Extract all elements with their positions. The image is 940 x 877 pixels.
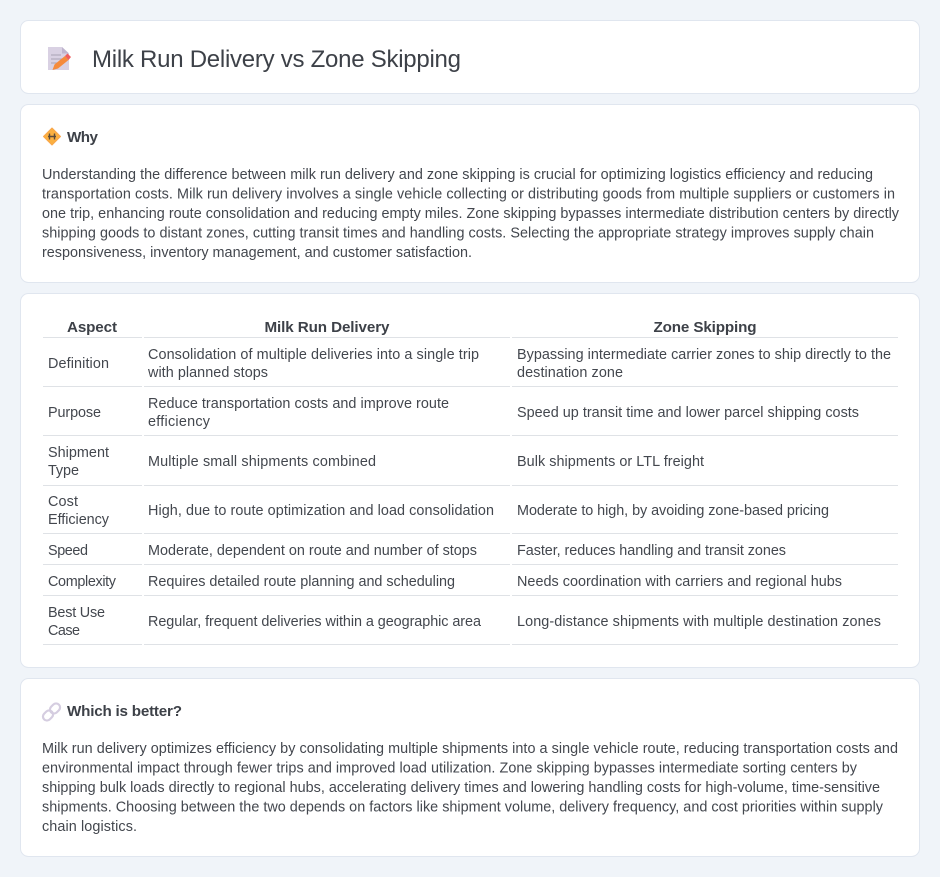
text block: why explanation: one trip, enhancing route consolidation and reducing empty miles. Zone skipping bypasses intermediate distribution centers by directly [42,206,900,222]
table row: complexity: Complexity [48,574,117,590]
table row: shipment type [48,445,704,479]
table row: purpose: efficiency [148,414,211,430]
table row: cost efficiency: Cost [48,494,78,510]
heading: which is better: Which is better? [67,703,182,720]
table row: best use case [48,605,881,639]
table row: definition: Consolidation of multiple deliveries into a single trip [148,347,479,363]
table row: definition: destination zone [517,365,623,381]
table row: cost efficiency: Efficiency [48,512,110,528]
table row: purpose [48,396,859,430]
table row: speed: Speed [48,543,88,559]
text block: why explanation: Understanding the difference between milk run delivery and zone skipping is crucial for optimizing logistics efficiency and reducing [42,167,873,183]
panel: which is better [20,678,920,856]
heading: title text: Milk Run Delivery vs Zone Skipping [92,46,461,73]
table header: Milk Run Delivery [264,319,390,336]
table row: speed: Faster, reduces handling and transit zones [517,543,786,559]
table row: definition: Definition [48,356,109,372]
table row: best use case: Case [48,623,80,639]
text block: verdict: shipping bulk loads directly to regional hubs, accelerating delivery times and lowering handling costs for high-volume, time-sensitive [42,780,880,796]
table row: complexity: Needs coordination with carriers and regional hubs [517,574,842,590]
table row: speed: Moderate, dependent on route and number of stops [148,543,477,559]
text block: why explanation [42,167,900,261]
icon: memo with pencil [48,47,71,70]
table row: best use case: Regular, frequent deliveries within a geographic area [148,614,481,630]
table row: speed [48,543,786,559]
text block: verdict: shipments. Choosing between the two depends on factors like shipment volume, delivery frequency, and cost priorities within supply [42,800,884,816]
table header: Zone Skipping [654,319,756,336]
text block: verdict: environmental impact through fewer trips and improved load utilization. Zone skipping bypasses intermediate sorting centers by [42,760,858,776]
table row: shipment type: Shipment [48,445,109,461]
icon: link [41,702,62,722]
table row: definition: with planned stops [147,365,268,381]
table row: shipment type: Type [48,463,79,479]
text block: verdict [42,741,898,835]
table header: Aspect [67,319,117,336]
text block: why explanation: shipping goods to distant zones, cutting transit times and handling costs. Selecting the appropriate strategy improves supply chain [42,226,874,242]
table row: best use case: Long-distance shipments with multiple destination zones [517,614,881,630]
table row: complexity: Requires detailed route planning and scheduling [148,574,455,590]
text block: verdict: Milk run delivery optimizes efficiency by consolidating multiple shipments into a single vehicle route, reducing transportation costs and [42,741,898,757]
table row: definition: Bypassing intermediate carrier zones to ship directly to the [517,347,891,363]
table row: cost efficiency: Moderate to high, by avoiding zone-based pricing [517,503,829,519]
text block: verdict: chain logistics. [42,819,137,835]
table row: cost efficiency [48,494,829,528]
panel: title [20,20,920,94]
table header [67,319,756,336]
table row: best use case: Best Use [48,605,105,621]
panel: why [20,104,920,282]
table row: purpose: Purpose [48,405,101,421]
table row: definition [48,347,891,381]
icon: diamond sign [44,128,60,145]
table row: shipment type: Multiple small shipments combined [148,454,376,470]
text block: why explanation: responsiveness, inventory management, and customer satisfaction. [42,245,472,261]
heading: why: Why [67,129,99,146]
table row: purpose: Reduce transportation costs and improve route [148,396,449,412]
table row: purpose: Speed up transit time and lower parcel shipping costs [517,405,859,421]
panel: comparison table [20,294,920,668]
table row: cost efficiency: High, due to route optimization and load consolidation [148,503,494,519]
table row: shipment type: Bulk shipments or LTL freight [517,454,704,470]
table row: complexity [48,574,842,590]
text block: why explanation: transportation costs. Milk run delivery involves a single vehicle collecting or distributing goods from multiple suppliers or customers in [42,186,895,202]
